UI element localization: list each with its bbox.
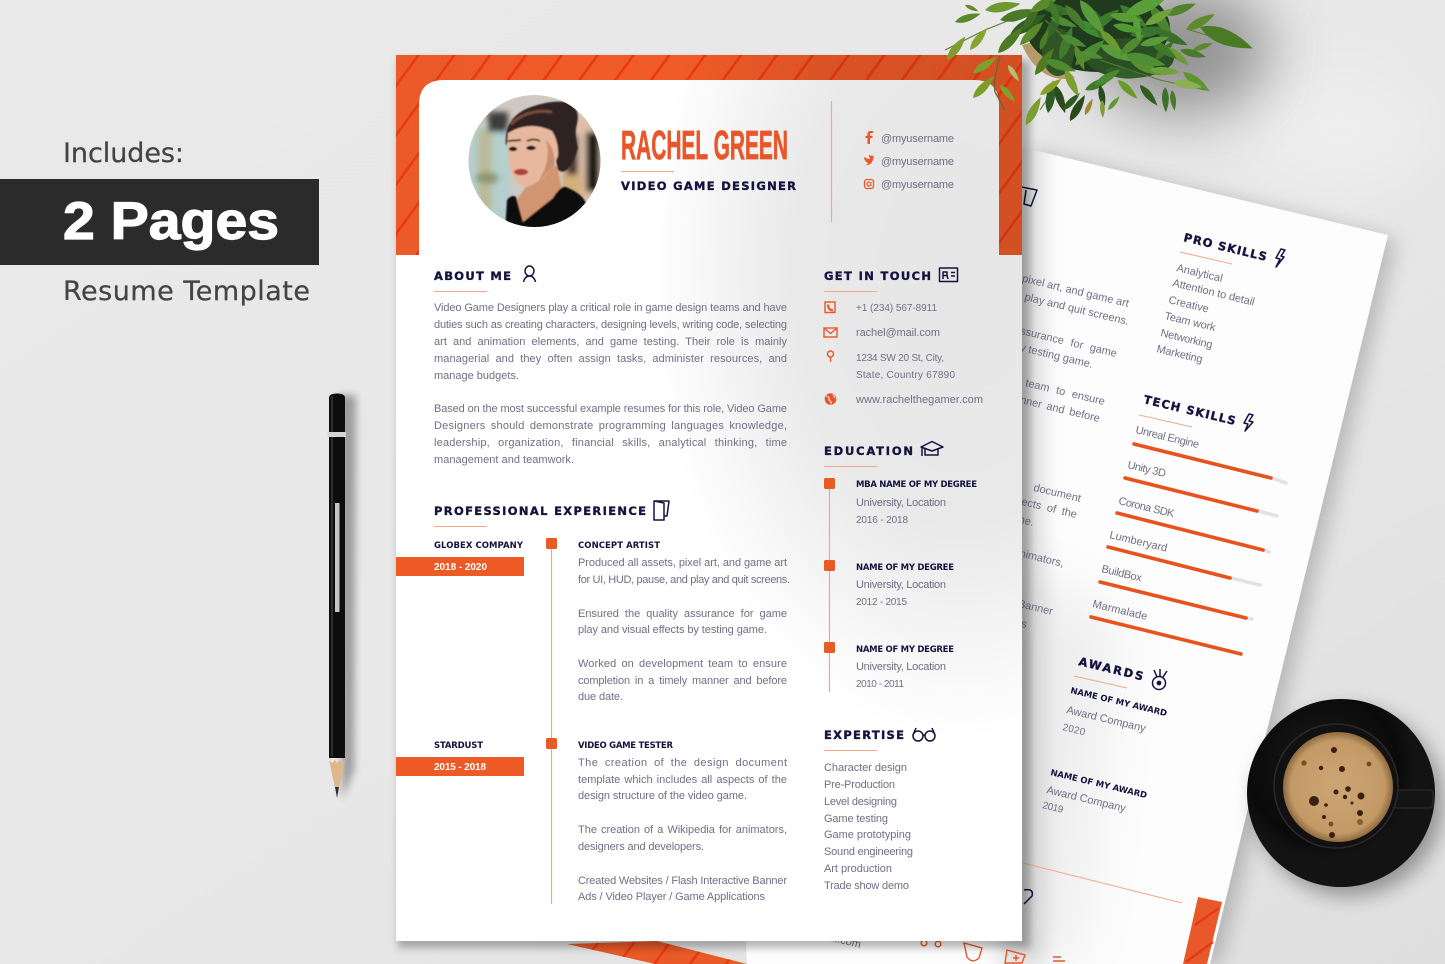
- partial experience text: aspects of the: [1003, 492, 1078, 521]
- degree 2: [856, 563, 954, 608]
- job 1 details: due date.: [578, 691, 623, 703]
- partial experience text: y testing game.: [1019, 342, 1094, 371]
- coffee cup: [1247, 699, 1443, 896]
- plant: [944, 0, 1256, 127]
- skill labels: Corona SDK: [1117, 495, 1176, 520]
- job 2 company and date: STARDUST: [434, 741, 483, 751]
- job 1 details: CONCEPT ARTIST: [578, 541, 660, 551]
- sheet light shading: [704, 55, 1022, 657]
- heading: EDUCATION: [824, 444, 913, 458]
- awards list: Award Company: [1045, 784, 1127, 815]
- icon: facebook: [866, 131, 873, 144]
- awards list: Award Company: [1065, 704, 1147, 735]
- woven pot: [1022, 40, 1075, 79]
- icon: glasses: [913, 728, 935, 741]
- icon: map pin: [828, 351, 834, 362]
- dense inner leaves: [984, 0, 1207, 115]
- job 2 details: Created Websites / Flash Interactive Banner: [578, 875, 787, 887]
- outer leaves: [944, 0, 1256, 127]
- partial experience text: animators,: [1012, 546, 1065, 570]
- skill labels: Marmalade: [1091, 598, 1149, 623]
- face: [507, 126, 558, 187]
- icon: door: [654, 501, 669, 520]
- job title: VIDEO GAME DESIGNER: [621, 179, 796, 193]
- section: get in touch: 1234 SW 20 St, City,: [856, 353, 944, 364]
- background light and shadow: [1064, 0, 1302, 151]
- section: get in touch: State, Country 67890: [856, 370, 955, 381]
- shading from front page: [1000, 100, 1120, 964]
- expertise list: Game testing: [824, 813, 888, 825]
- expertise list: Level designing: [824, 796, 897, 808]
- hair: [506, 102, 578, 172]
- degree 1: [856, 480, 977, 526]
- job 2 company and date: 2015 - 2018: [434, 762, 486, 773]
- saucer: [1247, 699, 1435, 887]
- icon: globe: [825, 393, 836, 405]
- profile photo: [468, 95, 600, 227]
- icon: id card: [940, 268, 958, 282]
- timeline: [550, 545, 552, 904]
- neck and chest: [516, 164, 563, 223]
- partial experience text: Banner: [1017, 598, 1054, 618]
- section: about me: art and animation elements, and game testing. Their role is mainly: [434, 336, 788, 348]
- job 1 details: [578, 541, 790, 703]
- partial experience text: mail.com: [817, 929, 862, 951]
- icon: instagram: [864, 180, 874, 188]
- social links: @myusername: [881, 179, 954, 191]
- section: get in touch: www.rachelthegamer.com: [855, 394, 983, 406]
- heading: awards: AWARDS: [1077, 654, 1145, 683]
- paragraph text: Video Game Designers play a critical role in game design teams and have: [434, 302, 787, 314]
- list: pro skills: Team work: [1163, 310, 1217, 334]
- job 2 details: template which includes all aspects of the: [578, 774, 787, 786]
- awards list: 2020: [1061, 722, 1087, 738]
- section: about me: Based on the most successful example resumes for this role, Video Game: [434, 403, 787, 415]
- stems: [945, 12, 1250, 110]
- partial experience text: banner and before: [1007, 391, 1101, 425]
- expertise list: Trade show demo: [824, 880, 909, 892]
- sheet: [746, 147, 1388, 964]
- section: about me: managerial and they often assign tasks, administer resources, and: [434, 353, 787, 365]
- job 1 details: for UI, HUD, pause, and play and quit screens.: [578, 574, 790, 586]
- section: about me: Designers should demonstrate programming languages knowledge,: [434, 420, 787, 432]
- list: pro skills: Marketing: [1155, 343, 1204, 366]
- timeline: [828, 485, 830, 692]
- social links: [864, 131, 954, 191]
- expertise list: Game prototyping: [824, 829, 911, 841]
- degree 3: NAME OF MY DEGREE: [856, 645, 954, 655]
- section: get in touch: [824, 268, 983, 406]
- expertise list: Art production: [824, 863, 892, 875]
- sprig over page: [970, 54, 1021, 110]
- skill labels: Unity 3D: [1126, 459, 1167, 480]
- heading: tech skills: TECH SKILLS: [1142, 392, 1237, 428]
- degree 3: 2010 - 2011: [856, 679, 904, 690]
- job 1 details: Worked on development team to ensure: [578, 658, 787, 670]
- pencil body: [329, 394, 345, 758]
- job 2 details: [578, 741, 787, 903]
- degree 3: University, Location: [856, 661, 946, 673]
- heading: awards: [1074, 654, 1167, 690]
- lips: [514, 169, 528, 175]
- job 1 details: Ensured the quality assurance for game: [578, 608, 787, 620]
- icon: partial door: [1022, 186, 1038, 207]
- icon: graduation cap: [921, 442, 943, 456]
- dark banner: 2 Pages: [63, 192, 279, 251]
- job 2 details: The creation of a Wikipedia for animators,: [578, 824, 787, 836]
- expertise list: Character design: [824, 762, 907, 774]
- section: about me: [434, 266, 788, 466]
- pencil band: [328, 432, 346, 437]
- job 1 company and date: 2018 - 2020: [434, 562, 487, 573]
- section: professional experience: [396, 501, 790, 904]
- skill labels: BuildBox: [1100, 563, 1143, 585]
- bottom-right orange corner: [1183, 897, 1222, 964]
- coffee surface: [1283, 732, 1393, 842]
- pencil tip: [329, 760, 345, 788]
- pencil label: [335, 503, 340, 612]
- skill labels: Lumberyard: [1108, 529, 1168, 555]
- name: RACHEL GREEN: [621, 122, 788, 168]
- section: get in touch: +1 (234) 567-8911: [856, 303, 937, 314]
- degree 2: NAME OF MY DEGREE: [856, 563, 954, 573]
- pencil: [328, 394, 356, 800]
- dark foliage core: [1026, 0, 1170, 72]
- social links: @myusername: [881, 156, 954, 168]
- partial experience text: d play and quit screens.: [1014, 289, 1130, 328]
- partial experience text: game.: [1003, 510, 1035, 529]
- partial experience text: document: [1032, 482, 1082, 505]
- black top: [505, 187, 586, 232]
- handle: [1394, 790, 1433, 808]
- orange header: [396, 55, 1022, 255]
- icon: person: [524, 266, 536, 282]
- sheet: [396, 55, 1022, 941]
- section: education: [824, 442, 977, 692]
- expertise list: Pre-Production: [824, 779, 895, 791]
- heading: ABOUT ME: [434, 269, 511, 283]
- front page shadow: [398, 60, 1030, 948]
- job 2 details: Ads / Video Player / Game Applications: [578, 891, 766, 903]
- heading: PROFESSIONAL EXPERIENCE: [434, 504, 646, 518]
- skill bars: [1091, 444, 1286, 654]
- list: pro skills: Networking: [1159, 327, 1214, 351]
- awards list: 2019: [1041, 800, 1065, 816]
- cup shadow: [1255, 708, 1443, 896]
- heading: pro skills: PRO SKILLS: [1182, 230, 1268, 264]
- coffee bubbles: [1301, 747, 1371, 838]
- degree 3: [856, 645, 954, 690]
- icon: twitter: [864, 155, 874, 165]
- section: about me: leadership, organization, financial skills, analytical thinking, time: [434, 437, 787, 449]
- left heading: includes: Includes:: [63, 138, 184, 169]
- degree 1: University, Location: [856, 497, 946, 509]
- pencil shadow: [338, 395, 356, 800]
- section: about me: management and teamwork.: [434, 454, 574, 466]
- section: about me: duties such as creating characters, designing levels, writing code, selecting: [434, 319, 787, 331]
- partial experience text: Ads: [1007, 615, 1029, 631]
- partial experience text: [817, 273, 1130, 951]
- list: pro skills: Creative: [1167, 294, 1210, 315]
- job 1 details: Produced all assets, pixel art, and game art: [578, 557, 787, 569]
- job 1 details: play and visual effects by testing game.: [578, 624, 767, 636]
- partial experience text: assurance for game: [1013, 324, 1118, 360]
- icon: mail: [824, 328, 837, 337]
- degree 1: 2016 - 2018: [856, 515, 908, 526]
- list: pro skills: [1155, 262, 1256, 366]
- job 2 details: VIDEO GAME TESTER: [578, 741, 673, 751]
- partial experience text: team to ensure: [1024, 377, 1106, 408]
- expertise list: [824, 762, 913, 892]
- section: expertise: [824, 728, 935, 892]
- bottom orange strip: [567, 941, 747, 964]
- white header panel: [419, 80, 999, 255]
- dark banner: [0, 179, 319, 265]
- job 2 company and date: [396, 741, 524, 776]
- social links: @myusername: [881, 133, 954, 145]
- skill labels: [1091, 424, 1200, 623]
- degree 1: MBA NAME OF MY DEGREE: [856, 480, 977, 490]
- skill labels: Unreal Engine: [1134, 424, 1200, 451]
- sheet shadow: [1000, 150, 1396, 964]
- eyes and brows: [508, 140, 540, 141]
- section: about me: manage budgets.: [434, 370, 519, 382]
- bottom orange icons: [921, 940, 1065, 963]
- awards list: [1041, 686, 1168, 816]
- partial experience text: pixel art, and game art: [1021, 273, 1130, 310]
- back resume page: [567, 70, 1396, 964]
- icon: phone: [825, 302, 835, 312]
- job 2 details: designers and developers.: [578, 841, 704, 853]
- heading: GET IN TOUCH: [824, 269, 931, 283]
- list: pro skills: Analytical: [1175, 262, 1224, 285]
- expertise list: Sound engineering: [824, 846, 913, 858]
- left subheading: resume template: Resume Template: [63, 276, 310, 307]
- awards list: NAME OF MY AWARD: [1049, 768, 1148, 801]
- job 1 company and date: [396, 541, 524, 576]
- awards list: NAME OF MY AWARD: [1069, 686, 1168, 719]
- degree 2: 2012 - 2015: [856, 597, 907, 608]
- degree 2: University, Location: [856, 579, 946, 591]
- job 2 details: design structure of the video game.: [578, 790, 747, 802]
- icon: partial heart: [1024, 890, 1032, 904]
- list: pro skills: Attention to detail: [1171, 277, 1256, 309]
- job 1 company and date: GLOBEX COMPANY: [434, 541, 524, 551]
- cup rim: [1274, 724, 1398, 848]
- job 1 details: completion in a timely manner and before: [578, 675, 787, 687]
- heading: EXPERTISE: [824, 728, 904, 742]
- section: get in touch: rachel@mail.com: [856, 327, 940, 339]
- job 2 details: The creation of the design document: [578, 757, 787, 769]
